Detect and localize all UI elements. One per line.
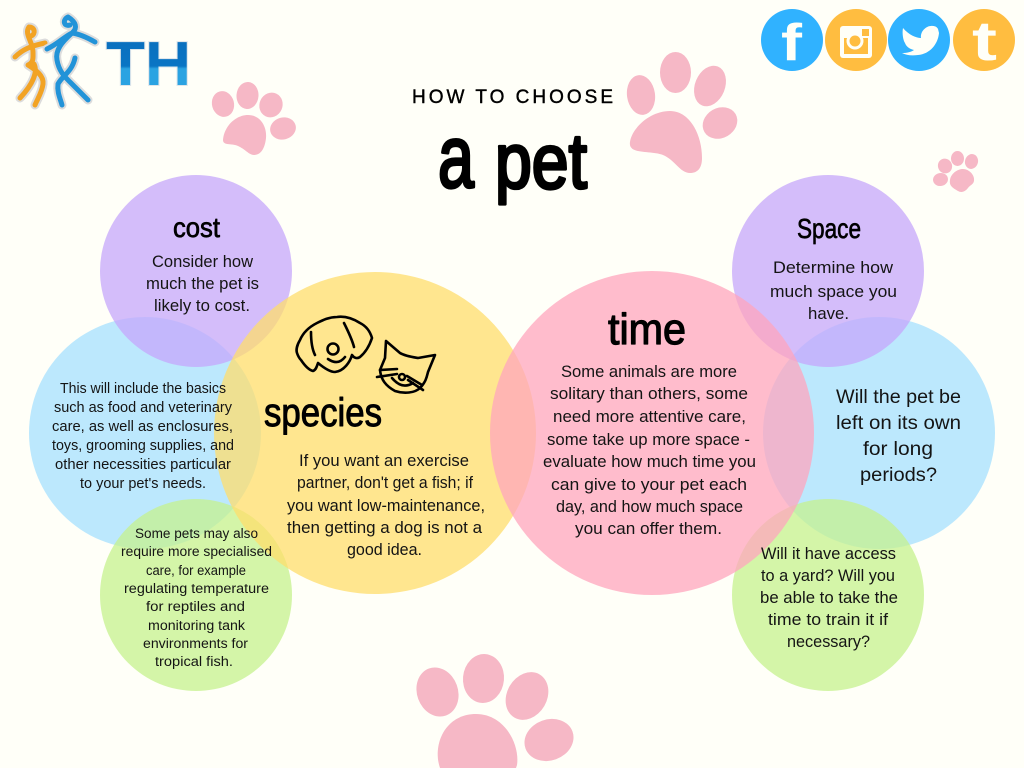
panel: time [543,305,756,538]
panel: space: Space [797,213,861,244]
panel: left blue text [52,381,234,492]
panel: right blue text: left on its own [836,412,961,434]
icon: instagram [825,9,887,71]
logo: TH: TH [106,30,191,99]
title: a [438,107,474,206]
panel: time: evaluate how much time you [543,453,756,471]
social icons [761,9,1015,72]
panel: left blue text: toys, grooming supplies, and [52,438,234,454]
icon: tumblr [953,9,1015,72]
panel: left green text: tropical fish. [155,654,233,669]
paw: bottom [410,652,580,768]
circle: space background [732,175,924,367]
panel: species: species [264,391,382,435]
panel: time: Some animals are more [561,363,737,381]
circle: species background [214,272,536,594]
panel: right blue text: periods? [860,464,937,486]
panel: species: partner, don't get a fish; if [297,474,473,492]
panel: left green text: require more specialised [121,544,272,559]
panel: cost: likely to cost. [154,297,250,315]
circle: right blue background [763,317,995,549]
panel: left blue text: such as food and veterinary [54,400,233,416]
icon: cat [377,341,435,393]
icon: dog [297,317,372,372]
panel: left blue text: This will include the basics [60,381,226,397]
panel: right blue text: Will the pet be [836,386,961,408]
circle: left blue background [29,317,261,549]
icon: twitter [888,9,950,71]
panel: left blue text: to your pet's needs. [80,476,206,492]
panel: left blue text: care, as well as enclosures, [52,419,233,435]
panel: time: solitary than others, some [550,385,748,403]
paw: top right [932,151,980,192]
panel: left green text: for reptiles and [146,599,245,614]
panel: space: have. [808,305,849,323]
title [412,87,613,206]
icon: facebook [761,9,823,72]
icon: tumblr: t [972,9,997,72]
panel: right blue text [836,386,961,486]
panel: cost [146,212,259,315]
panel: time: some take up more space - [547,431,750,449]
circle: left green background [100,499,292,691]
panel: species [264,317,485,559]
panel: right green text: time to train it if [768,611,888,629]
logo: TH [15,17,191,105]
title: HOW TO CHOOSE [412,87,613,108]
panel: time: need more attentive care, [553,408,746,426]
panel: left green text: care, for example [146,563,246,578]
icon: facebook: f [781,14,803,72]
panel: right blue text: for long [863,438,933,460]
panel: space: much space you [770,283,897,301]
paw: top left [209,81,298,155]
panel: time: you can offer them. [575,520,722,538]
panel: right green text: to a yard? Will you [761,567,895,585]
panel: left green text [121,526,272,669]
panel: species: you want low-maintenance, [287,497,485,515]
panel: time: can give to your pet each [551,476,747,494]
panel: space [770,213,897,323]
panel: left green text: environments for [143,636,249,651]
panel: left blue text: other necessities particular [55,457,231,473]
panel: left green text: regulating temperature [124,581,269,596]
circle: cost background [100,175,292,367]
panel: left green text: Some pets may also [135,526,258,541]
panel: right green text: necessary? [787,633,870,651]
panel: species: good idea. [347,541,422,559]
panel: right green text: be able to take the [760,589,898,607]
panel: cost: Consider how [152,253,253,271]
panel: species: then getting a dog is not a [287,519,483,537]
circle: right green background [732,499,924,691]
panel: species: If you want an exercise [299,452,469,470]
title: pet [495,117,587,205]
panel: left green text: monitoring tank [148,618,245,633]
panel: time: day, and how much space [556,498,743,516]
panel: cost: cost [173,212,220,243]
panel: right green text: Will it have access [761,545,896,563]
panel: time: time [608,305,686,354]
panel: space: Determine how [773,259,893,277]
paw: top centre [624,52,743,173]
panel: right green text [760,545,898,651]
circle: time background [490,271,814,595]
panel: cost: much the pet is [146,275,259,293]
